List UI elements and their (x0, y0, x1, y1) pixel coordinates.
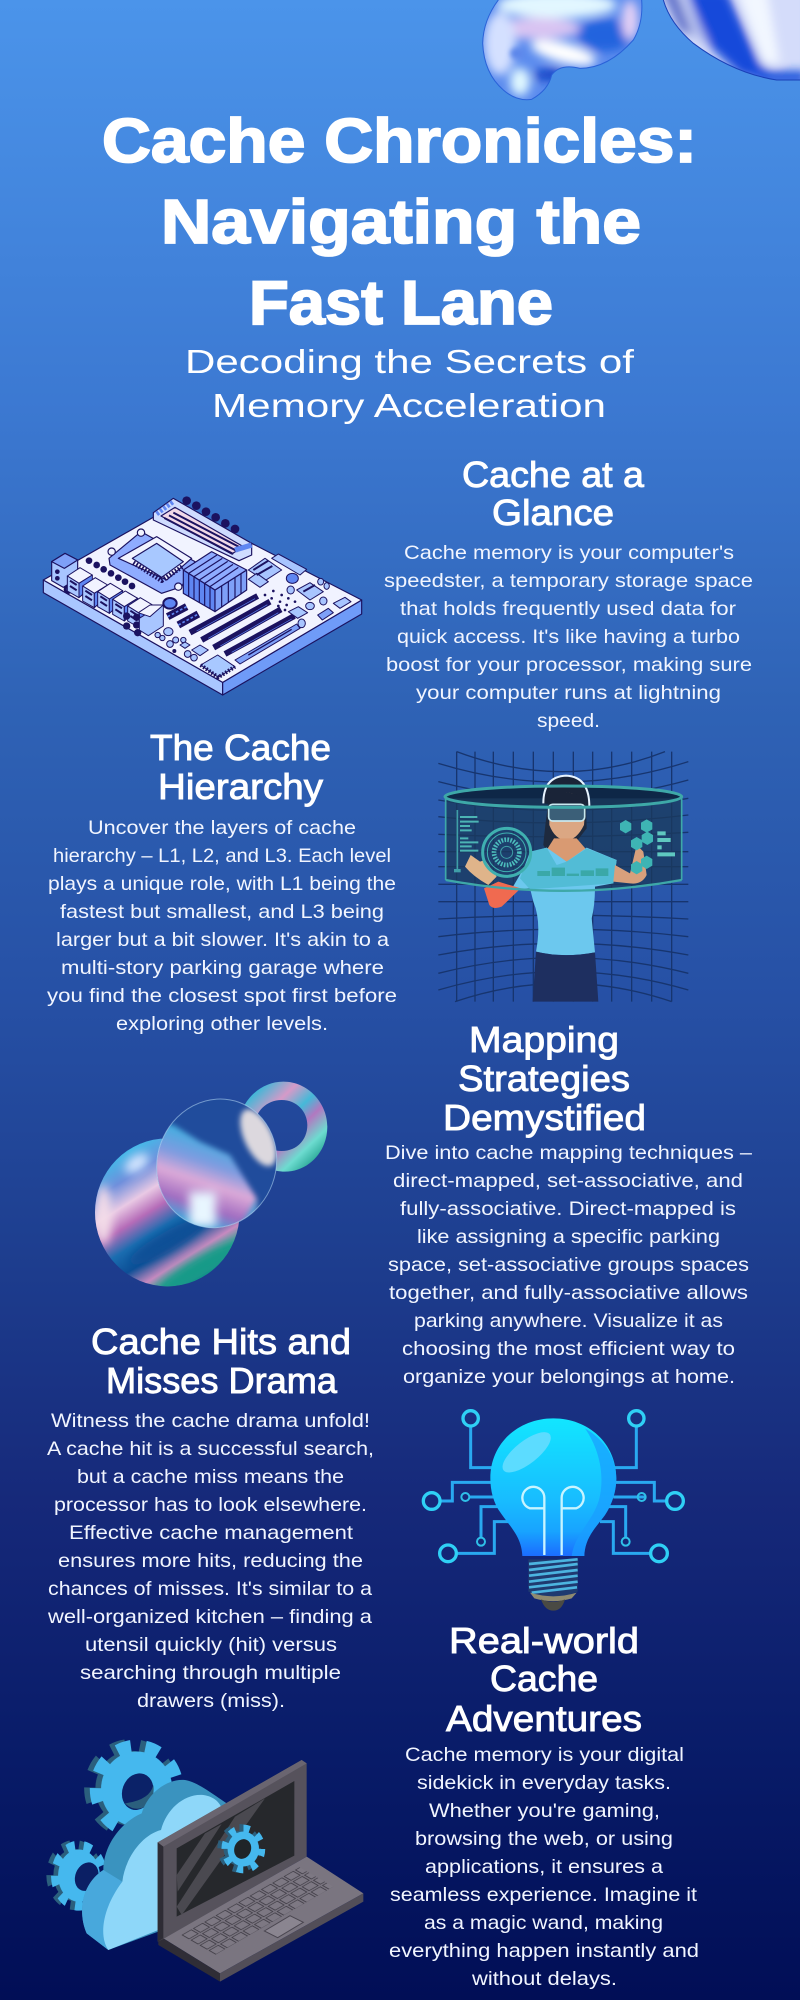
text block: direct-mapped, set-associative, and (393, 1170, 743, 1192)
text block: plays a unique role, with L1 being the (48, 873, 396, 895)
text block: Witness the cache drama unfold! (51, 1410, 370, 1432)
text block: you find the closest spot first before (47, 985, 397, 1007)
heading: Hierarchy (158, 766, 323, 807)
text block: drawers (miss). (137, 1690, 285, 1712)
heading (462, 454, 645, 533)
heading: Glance (492, 492, 614, 533)
visor (549, 804, 585, 821)
heading: Real-world (449, 1620, 639, 1661)
hologram chart (537, 868, 608, 876)
text block: exploring other levels. (116, 1013, 328, 1035)
text block: searching through multiple (80, 1662, 341, 1684)
text block: speed. (537, 710, 600, 732)
hologram hexagons (620, 819, 653, 874)
text block: ensures more hits, reducing the (58, 1550, 363, 1572)
title: Cache Chronicles: (102, 107, 697, 176)
text block: but a cache miss means the (77, 1466, 344, 1488)
text block (389, 1744, 699, 1990)
text block: boost for your processor, making sure (386, 654, 752, 676)
text block (385, 1142, 752, 1388)
heading (91, 1321, 351, 1401)
text block: your computer runs at lightning (416, 682, 721, 704)
icon: cloud gears and laptop (50, 1746, 363, 1982)
heading (150, 727, 331, 807)
heading: Misses Drama (106, 1360, 338, 1401)
panel: the cache hierarchy (47, 727, 397, 1035)
heading: Demystified (443, 1097, 646, 1138)
title: Fast Lane (249, 269, 553, 338)
text block: well-organized kitchen – finding a (47, 1606, 372, 1628)
text block: that holds frequently used data for (400, 598, 737, 620)
text block: processor has to look elsewhere. (54, 1494, 367, 1516)
text block: Whether you're gaming, (429, 1800, 660, 1822)
text block: seamless experience. Imagine it (390, 1884, 698, 1906)
text block: utensil quickly (hit) versus (85, 1634, 337, 1656)
text block: Uncover the layers of cache (88, 817, 356, 839)
text block: chances of misses. It's similar to a (48, 1578, 372, 1600)
text block: sidekick in everyday tasks. (417, 1772, 671, 1794)
text block: quick access. It's like having a turbo (397, 626, 740, 648)
big gear (90, 1746, 177, 1832)
icon: iridescent sphere, lens and ring (90, 1082, 327, 1302)
icon: motherboard illustration (43, 496, 362, 695)
heading: Adventures (446, 1698, 642, 1739)
hologram panel (446, 798, 682, 891)
heading: The Cache (150, 727, 331, 768)
text block: parking anywhere. Visualize it as (414, 1310, 723, 1332)
text block: together, and fully-associative allows (389, 1282, 748, 1304)
text block: everything happen instantly and (389, 1940, 699, 1962)
hologram rims (445, 786, 682, 891)
text block: fully-associative. Direct-mapped is (400, 1198, 736, 1220)
icon: liquid glass blobs (480, 0, 800, 103)
panel: real-world cache adventures (389, 1620, 699, 1990)
text block: like assigning a specific parking (417, 1226, 720, 1248)
text block: fastest but smallest, and L3 being (60, 901, 384, 923)
text block: Cache memory is your computer's (404, 542, 734, 564)
hologram dial (483, 828, 531, 876)
subtitle: Decoding the Secrets of (185, 343, 635, 380)
title: Navigating the (161, 188, 641, 257)
text block: Effective cache management (69, 1522, 354, 1544)
text block: Cache memory is your digital (405, 1744, 684, 1766)
panel: mapping strategies demystified (385, 1019, 752, 1388)
icon: circuit light bulb (423, 1411, 683, 1611)
cloud (82, 1780, 227, 1950)
laptop (158, 1760, 363, 1982)
text block: browsing the web, or using (415, 1828, 673, 1850)
text block: A cache hit is a successful search, (47, 1438, 374, 1460)
text block: Dive into cache mapping techniques – (385, 1142, 752, 1164)
text block: applications, it ensures a (425, 1856, 663, 1878)
heading: Cache (490, 1658, 598, 1699)
text block (384, 542, 753, 732)
heading: Cache Hits and (91, 1321, 351, 1362)
panel: cache hits and misses drama (47, 1321, 374, 1712)
text block (47, 1410, 374, 1712)
text block: hierarchy – L1, L2, and L3. Each level (53, 845, 391, 867)
heading: Cache at a (462, 454, 645, 495)
heading (443, 1019, 646, 1138)
text block: speedster, a temporary storage space (384, 570, 753, 592)
text block: choosing the most efficient way to (402, 1338, 735, 1360)
text block: multi-story parking garage where (61, 957, 384, 979)
icon: woman with VR headset and holographic screen (438, 752, 688, 1002)
subtitle (185, 343, 635, 424)
small gear (50, 1845, 103, 1906)
heading: Mapping (469, 1019, 619, 1060)
title (102, 107, 697, 338)
subtitle: Memory Acceleration (212, 387, 606, 424)
text block (47, 817, 397, 1035)
text block: as a magic wand, making (424, 1912, 663, 1934)
heading: Strategies (458, 1058, 630, 1099)
text block: organize your belongings at home. (403, 1366, 735, 1388)
text block: without delays. (471, 1968, 617, 1990)
text block: space, set-associative groups spaces (388, 1254, 749, 1276)
heading (446, 1620, 642, 1739)
panel: cache at a glance (384, 454, 753, 732)
text block: larger but a bit slower. It's akin to a (56, 929, 389, 951)
